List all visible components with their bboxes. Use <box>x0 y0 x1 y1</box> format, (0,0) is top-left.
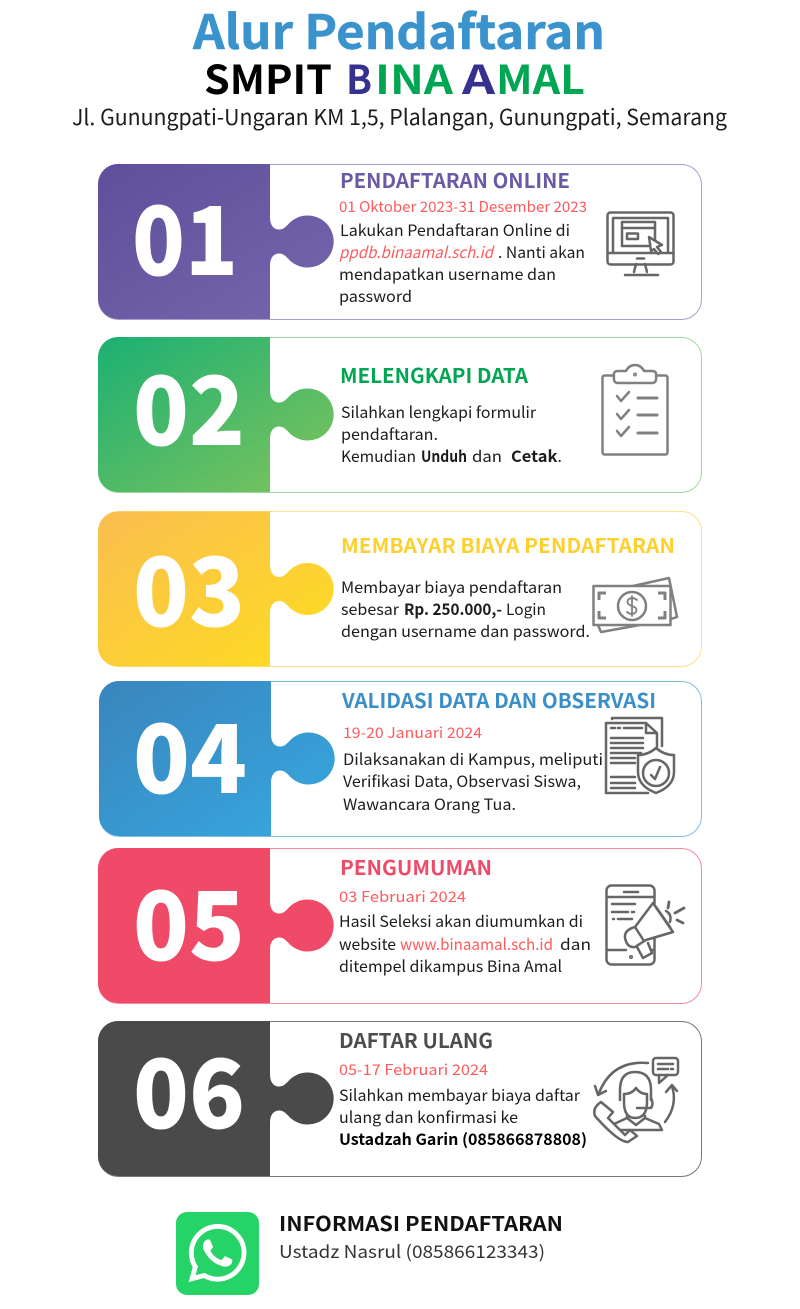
heading 02: MELENGKAPI DATA <box>340 360 528 389</box>
puzzle block 03 <box>98 512 334 666</box>
heading 06: DAFTAR ULANG <box>339 1025 493 1054</box>
body 03 <box>341 575 590 642</box>
puzzle block 04 <box>99 681 335 836</box>
number 03: 03 <box>133 517 245 654</box>
panel: step 04 validasi data dan observasi <box>99 681 702 836</box>
body 05: Hasil Seleksi akan diumumkan di <box>339 909 583 932</box>
subtitle: SMPIT BINA AMAL: SMPIT <box>204 48 332 106</box>
body 06: ulang dan konfirmasi ke <box>339 1105 518 1128</box>
panel: step 01 pendaftaran online <box>98 164 702 320</box>
puzzle block 06 <box>98 1021 334 1176</box>
body 05: ditempel dikampus Bina Amal <box>339 954 562 977</box>
number 06: 06 <box>133 1019 245 1156</box>
body 03: Membayar biaya pendaftaran <box>341 575 562 598</box>
puzzle block 02 <box>98 337 334 492</box>
body 04: Dilaksanakan di Kampus, meliputi <box>343 747 603 770</box>
heading 04: VALIDASI DATA DAN OBSERVASI <box>341 685 656 714</box>
subtitle: SMPIT BINA AMAL: B <box>346 48 372 106</box>
body 06: Ustadzah Garin (085866878808) <box>339 1127 587 1150</box>
body 05 <box>339 909 591 977</box>
body 01: mendapatkan username dan <box>339 262 556 285</box>
body 03: Login <box>506 597 546 620</box>
heading 03: MEMBAYAR BIAYA PENDAFTARAN <box>341 530 675 559</box>
footer heading: INFORMASI PENDAFTARAN <box>279 1207 563 1237</box>
number 02: 02 <box>133 336 245 473</box>
body 06 <box>339 1083 587 1150</box>
subtitle: SMPIT BINA AMAL <box>204 48 585 106</box>
icon: banknotes <box>594 578 677 632</box>
date 05: 03 Februari 2024 <box>339 886 466 907</box>
heading 01: PENDAFTARAN ONLINE <box>340 165 570 194</box>
body 01: . Nanti akan <box>498 240 585 263</box>
body 05: www.binaamal.sch.id <box>400 932 553 955</box>
body 03: dengan username dan password. <box>341 619 590 642</box>
panel: step 06 daftar ulang <box>98 1019 702 1176</box>
subtitle: SMPIT BINA AMAL: INA <box>375 48 453 106</box>
date 06: 05-17 Februari 2024 <box>339 1059 488 1080</box>
number 04: 04 <box>133 684 247 821</box>
body 02: pendaftaran. <box>341 422 438 445</box>
body 06: Silahkan membayar biaya daftar <box>339 1083 581 1106</box>
heading 05: PENGUMUMAN <box>340 852 492 881</box>
body 02: dan <box>472 444 502 467</box>
subtitle: SMPIT BINA AMAL: A <box>461 48 495 106</box>
puzzle block 05 <box>98 848 334 1003</box>
body 01: Lakukan Pendaftaran Online di <box>340 218 570 241</box>
body 04: Verifikasi Data, Observasi Siswa, <box>343 769 581 792</box>
subtitle: SMPIT BINA AMAL: MAL <box>496 48 585 106</box>
icon: whatsapp <box>176 1212 259 1295</box>
icon: document with shield <box>606 718 674 793</box>
body 04 <box>343 747 603 815</box>
icon: phone with megaphone <box>606 886 684 964</box>
body 02: Unduh <box>421 444 467 467</box>
body 05: website <box>339 932 396 955</box>
body 01: password <box>339 284 412 307</box>
number 01: 01 <box>132 166 238 303</box>
body 04: Wawancara Orang Tua. <box>343 792 516 815</box>
body 02: Cetak. <box>511 444 562 467</box>
number 05: 05 <box>133 851 245 988</box>
body 02: Silahkan lengkapi formulir <box>341 400 537 423</box>
body 01: ppdb.binaamal.sch.id <box>339 240 495 263</box>
body 03: Rp. 250.000,- <box>404 597 502 620</box>
icon: clipboard checklist <box>602 365 668 454</box>
date 04: 19-20 Januari 2024 <box>343 722 482 743</box>
panel: step 02 melengkapi data <box>98 336 702 492</box>
address: Jl. Gunungpati-Ungaran KM 1,5, Plalangan, Gunungpati, Semarang <box>72 100 728 132</box>
body 03: sebesar <box>341 597 400 620</box>
icon: computer monitor with cursor <box>608 212 674 275</box>
footer contact: Ustadz Nasrul (085866123343) <box>279 1239 545 1264</box>
panel: step 05 pengumuman <box>98 848 702 1004</box>
body 01 <box>339 218 585 307</box>
body 02: Kemudian <box>341 444 416 467</box>
puzzle block 01 <box>98 164 334 319</box>
panel: step 03 membayar biaya pendaftaran <box>98 512 702 666</box>
body 02 <box>341 400 562 467</box>
icon: customer service headset and phone <box>594 1058 678 1142</box>
body 05: dan <box>560 932 591 955</box>
date 01: 01 Oktober 2023-31 Desember 2023 <box>339 196 587 217</box>
footer: contact information <box>176 1207 563 1295</box>
